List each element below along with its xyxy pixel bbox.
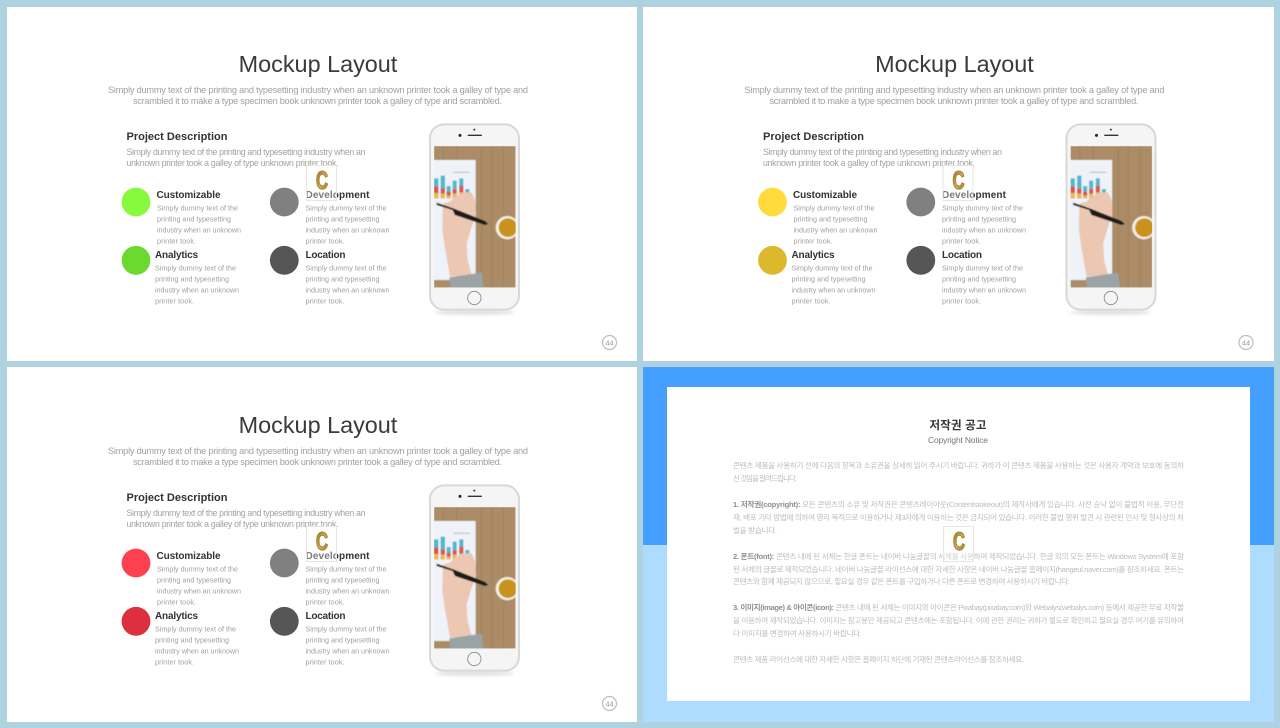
icon: watermark: C <box>316 528 328 556</box>
closing note: 콘텐츠 제품 라이선스에 대한 자세한 사항은 홈페이지 하단에 기재된 콘텐츠라이선스를 참조하세요. <box>733 654 1024 664</box>
feature: customizable: Customizable <box>156 551 221 562</box>
icon: watermark <box>944 526 974 562</box>
feature: location: Location <box>306 611 346 622</box>
feature: development: printing and typesetting <box>942 214 1016 224</box>
feature: location: industry when an unknown <box>306 286 390 294</box>
project description <box>126 492 366 529</box>
feature: development: Simply dummy text of the <box>306 564 386 574</box>
feature: location: printer took. <box>306 658 344 666</box>
feature: analytics <box>758 246 876 306</box>
feature: development: printing and typesetting <box>306 214 380 224</box>
feature: location: printing and typesetting <box>306 636 380 644</box>
panel: green mockup slide <box>7 7 637 361</box>
feature: customizable: printing and typesetting <box>157 214 231 224</box>
page number <box>602 696 616 710</box>
feature: customizable: Simply dummy text of the <box>157 564 238 574</box>
project description: unknown printer took a galley of type unknown printer took. <box>763 158 975 168</box>
phone mockup <box>430 124 519 315</box>
feature: customizable: printer took. <box>157 598 196 606</box>
feature: analytics: printing and typesetting <box>155 636 229 644</box>
section 1: copyright: 1. 저작권(copyright): 모든 콘텐츠의 소유 및 저작권은 콘텐츠레이아웃(Contentstokeout)의 제작사에게 있습니다. 사전 승낙 없이 불법적 이용, 무단전 <box>733 499 1184 509</box>
subtitle text <box>108 85 528 106</box>
phone mockup <box>1066 124 1155 315</box>
feature: development <box>270 549 390 606</box>
feature: location: Location <box>942 250 982 261</box>
section 3: image and icon <box>733 602 1184 638</box>
feature: analytics: Analytics <box>155 250 198 261</box>
section 3: image and icon: 을 이용하여 제작되었습니다. 이미지는 참고용만 제공되고 콘텐츠에는 포함됩니다. 이에 관한 권리는 귀하가 별도로 확인하고 필요실 경우 여기를 유의하여 <box>733 615 1184 625</box>
feature: analytics: Simply dummy text of the <box>792 264 872 272</box>
feature: customizable: printer took. <box>157 236 196 246</box>
feature: analytics <box>122 246 239 306</box>
icon: watermark: C <box>952 167 964 195</box>
feature: development: Simply dummy text of the <box>306 204 386 212</box>
page number: 44 <box>605 338 614 347</box>
project description: Project Description <box>763 131 864 143</box>
icon: watermark: C <box>316 167 328 195</box>
icon: watermark <box>306 166 336 200</box>
feature: analytics: printer took. <box>155 658 194 666</box>
intro paragraph <box>733 460 1184 483</box>
feature: analytics <box>122 607 239 666</box>
feature: analytics: industry when an unknown <box>155 646 239 656</box>
feature: customizable: Customizable <box>156 190 221 201</box>
feature: customizable: printer took. <box>794 236 832 246</box>
feature: customizable: industry when an unknown <box>794 226 878 234</box>
feature: location: printer took. <box>306 296 344 306</box>
title: Mockup Layout <box>239 412 398 438</box>
feature: location: printing and typesetting <box>306 274 380 284</box>
panel: yellow mockup slide <box>643 7 1274 361</box>
project description: unknown printer took a galley of type unknown printer took. <box>126 519 338 529</box>
feature: customizable: industry when an unknown <box>157 226 241 234</box>
feature: location <box>906 246 1026 306</box>
feature: analytics: printer took. <box>792 296 830 306</box>
project description: Simply dummy text of the printing and typesetting industry when an <box>126 147 366 157</box>
feature: development: printer took. <box>942 236 981 246</box>
feature: location: industry when an unknown <box>306 646 390 656</box>
section 2: font: 2. 폰트(font): 콘텐츠 내에 된 서체는 한글 폰트는 네이버 나눔글꼴의 서체를 사용하여 제작되었습니다. 한글 외의 모든 폰트는 Windows System에 포함 <box>733 551 1184 561</box>
feature: analytics: industry when an unknown <box>155 286 239 294</box>
feature: analytics: Simply dummy text of the <box>155 624 236 634</box>
feature: development: Development <box>306 190 370 201</box>
feature: development: Development <box>942 190 1007 201</box>
project description: Simply dummy text of the printing and typesetting industry when an <box>763 147 1002 157</box>
section 1: copyright <box>733 499 1184 535</box>
subtitle text: scrambled it to make a type specimen book unknown printer took a galley of type and scrambled. <box>133 96 502 106</box>
project description: unknown printer took a galley of type unknown printer took. <box>126 158 338 168</box>
project description: Project Description <box>126 492 228 504</box>
section 1: copyright: 벌을 받습니다. <box>733 525 777 535</box>
section 3: image and icon: 3. 이미지(image) & 아이콘(icon): 콘텐츠 내에 된 서체는 이미지와 아이콘은 Pixabay(pixabay.com)와 Webalys(webalys.com) 등에서 제공한 무료 저작물 <box>733 602 1184 612</box>
page number <box>1239 336 1253 350</box>
icon: watermark: C <box>953 528 965 556</box>
feature: customizable: Customizable <box>793 190 857 201</box>
feature: location: printer took. <box>942 296 981 306</box>
page number: 44 <box>1242 338 1250 347</box>
intro paragraph: 신 것임을 알려드립니다. <box>733 473 797 483</box>
icon: watermark <box>306 526 336 562</box>
subtitle text: Simply dummy text of the printing and typesetting industry when an unknown printer took a galley of type and <box>108 85 528 95</box>
project description <box>763 131 1002 168</box>
section 2: font <box>733 551 1184 586</box>
feature: customizable: printing and typesetting <box>157 576 231 584</box>
panel: copyright notice <box>643 367 1274 722</box>
feature: location <box>270 246 390 306</box>
subtitle text: Simply dummy text of the printing and typesetting industry when an unknown printer took a galley of type and <box>744 85 1164 95</box>
feature: location: Simply dummy text of the <box>306 624 386 634</box>
subtitle text: scrambled it to make a type specimen book unknown printer took a galley of type and scrambled. <box>770 96 1139 106</box>
feature: development: printing and typesetting <box>306 576 380 584</box>
feature: customizable: printing and typesetting <box>794 214 868 224</box>
feature: development: printer took. <box>306 598 344 606</box>
feature: location: Location <box>306 250 346 261</box>
icon: watermark <box>943 166 973 200</box>
feature: analytics: printing and typesetting <box>155 274 229 284</box>
feature: customizable: Simply dummy text of the <box>157 204 238 212</box>
feature: analytics: Analytics <box>155 611 198 622</box>
feature: development: printer took. <box>306 236 344 246</box>
subtitle text <box>744 85 1164 106</box>
feature: location <box>270 607 390 666</box>
feature: development: Simply dummy text of the <box>942 204 1023 212</box>
feature: location: industry when an unknown <box>942 286 1026 294</box>
section 1: copyright: 재, 배포 기타 방법에 의하여 영리 목적으로 이용하거나 제3자에게 이용하는 것은 금지되어 있습니다. 이러한 불법 행위 발견 시 관련된 민사 및 형사상의 처 <box>733 512 1184 522</box>
feature: customizable: industry when an unknown <box>157 586 241 596</box>
project description: Simply dummy text of the printing and typesetting industry when an <box>126 508 366 518</box>
feature: analytics: Analytics <box>792 250 835 261</box>
feature: analytics: Simply dummy text of the <box>155 264 236 272</box>
feature: development <box>906 188 1026 246</box>
title: Mockup Layout <box>875 51 1034 77</box>
project description: Project Description <box>126 131 228 143</box>
feature: development: industry when an unknown <box>942 226 1026 234</box>
section 2: font: 된 서체의 글꼴로 제작되었습니다. 네이버 나눔글꼴 라이선스에 대한 자세한 사항은 네이버 나눔글꼴 홈페이지(hangeul.naver.com)를 참조하세요. 폰트는 <box>733 564 1184 574</box>
feature: location: Simply dummy text of the <box>942 264 1023 272</box>
subtitle text: Simply dummy text of the printing and typesetting industry when an unknown printer took a galley of type and <box>108 446 528 456</box>
feature: development: Development <box>306 551 370 562</box>
feature: customizable: Simply dummy text of the <box>794 204 874 212</box>
feature: customizable <box>122 549 241 606</box>
panel: red mockup slide <box>7 367 637 722</box>
feature: location: printing and typesetting <box>942 274 1016 284</box>
feature: location: Simply dummy text of the <box>306 264 386 272</box>
feature: customizable <box>122 188 241 246</box>
heading: copyright notice: 저작권 공고 <box>930 418 987 432</box>
page number: 44 <box>605 699 614 708</box>
feature: customizable <box>758 188 878 246</box>
feature: analytics: printer took. <box>155 296 194 306</box>
intro paragraph: 콘텐츠 제품을 사용하기 전에 다음의 항목과 소유권을 상세히 읽어 주시기 바랍니다. 귀하가 이 콘텐츠 제품을 사용하는 것은 사용자 계약과 보호에 동의하 <box>733 460 1184 470</box>
subtitle text: scrambled it to make a type specimen book unknown printer took a galley of type and scrambled. <box>133 457 502 467</box>
project description <box>126 131 366 168</box>
feature: development <box>270 188 390 246</box>
section 3: image and icon: 다 이미지를 변경하여 사용하시기 바랍니다. <box>733 628 862 638</box>
feature: development: industry when an unknown <box>306 586 390 596</box>
heading: copyright notice: Copyright Notice <box>928 435 988 445</box>
feature: analytics: industry when an unknown <box>792 286 876 294</box>
page number <box>602 336 616 350</box>
phone mockup <box>430 485 519 676</box>
heading: copyright notice <box>928 418 988 445</box>
section 2: font: 콘텐츠와 함께 제공되지 않으므로, 필요실 경우 같은 폰트를 구입하거나 다른 폰트로 변경하여 사용하시기 바랍니다. <box>733 576 1070 586</box>
title: Mockup Layout <box>239 51 398 77</box>
feature: analytics: printing and typesetting <box>792 274 866 284</box>
feature: development: industry when an unknown <box>306 226 390 234</box>
subtitle text <box>108 446 528 467</box>
